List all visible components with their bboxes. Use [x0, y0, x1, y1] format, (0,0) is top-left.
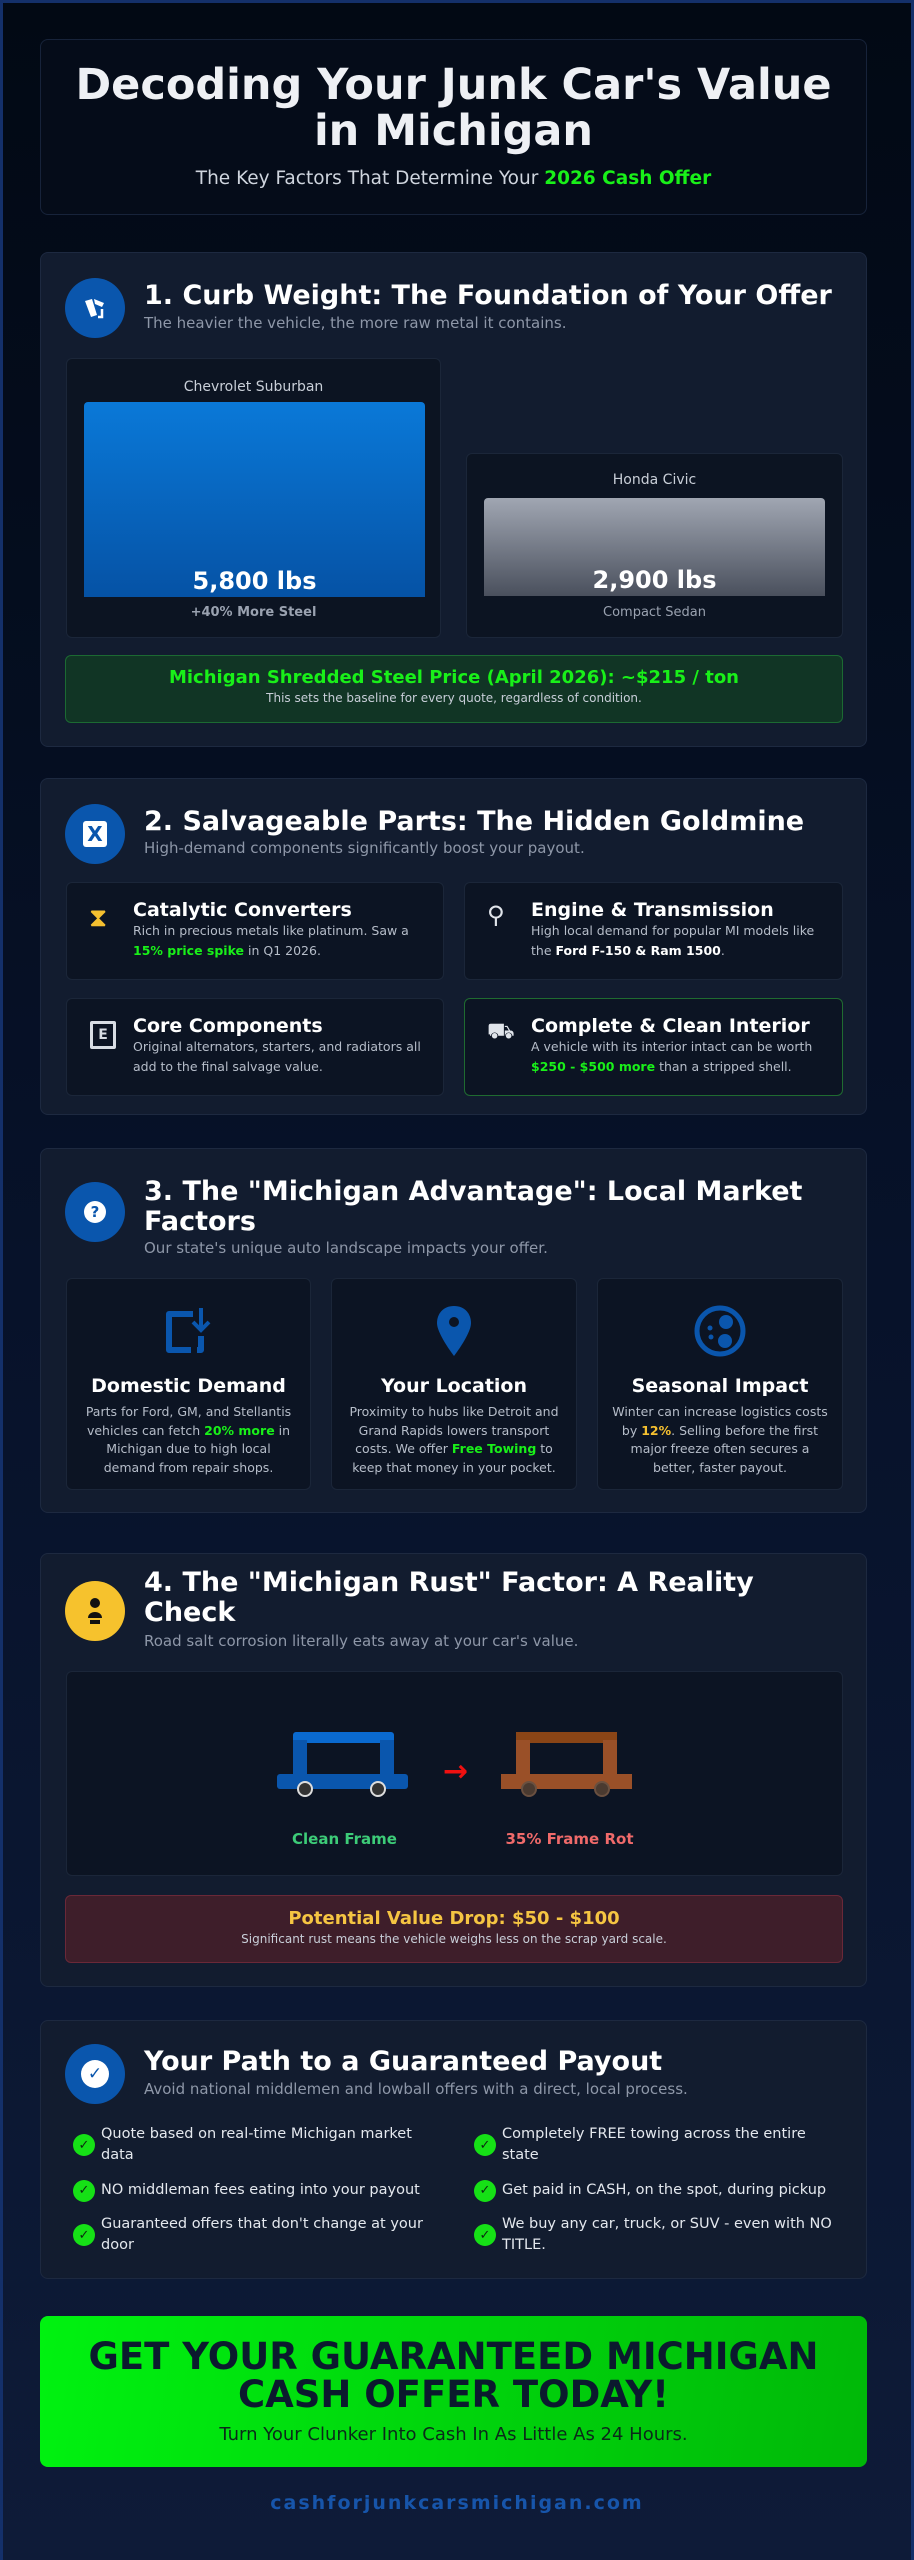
card: seasonal: Seasonal Impact: [632, 1375, 808, 1397]
panel: michigan advantage: [40, 1148, 867, 1513]
card: domestic demand: Parts for Ford, GM, and Stellantis vehicles can fetch 20% more in Michigan due to high local demand from repair shops.: [86, 1404, 291, 1474]
icon: warning: [65, 1581, 125, 1641]
checklist: [73, 2126, 832, 2253]
subheading: High-demand components significantly boost your payout.: [144, 839, 585, 857]
icon: question: [65, 1182, 125, 1242]
card: interior: A vehicle with its interior intact can be worth $250 - $500 more than a stripped shell.: [531, 1039, 812, 1074]
subheading: Avoid national middlemen and lowball offers with a direct, local process.: [144, 2080, 688, 2098]
heading: 1. Curb Weight: The Foundation of Your Offer: [144, 280, 832, 311]
icon: question: ?: [91, 1203, 99, 1221]
icon: check: [65, 2044, 125, 2104]
icon: core: [90, 1021, 116, 1049]
arrow: →: [443, 1754, 468, 1789]
bar: civic: 2,900 lbs: [593, 566, 716, 594]
bar: suburban: 5,800 lbs: [193, 567, 316, 595]
heading: [144, 1176, 802, 1237]
card: engine: Engine & Transmission: [531, 899, 774, 921]
callout: steel price: This sets the baseline for every quote, regardless of condition.: [266, 691, 642, 705]
subheading: Road salt corrosion literally eats away at your car's value.: [144, 1632, 578, 1650]
callout: steel price: Michigan Shredded Steel Price (April 2026): ~$215 / ton: [169, 667, 739, 688]
icon: pin: [437, 1306, 471, 1356]
card: interior: [464, 998, 843, 1096]
bar: suburban: Chevrolet Suburban: [184, 379, 323, 395]
heading: Your Path to a Guaranteed Payout: [144, 2046, 662, 2077]
bar: civic: Compact Sedan: [603, 605, 706, 620]
icon: clean frame: [277, 1732, 408, 1797]
icon: x: [65, 804, 125, 864]
icon: import: [166, 1308, 210, 1353]
heading: Check: [144, 1597, 235, 1628]
heading: Factors: [144, 1206, 256, 1237]
card: engine: High local demand for popular MI models like the Ford F-150 & Ram 1500.: [531, 923, 814, 958]
panel: salvageable parts: [40, 778, 867, 1115]
cta heading: GET YOUR GUARANTEED MICHIGAN: [89, 2335, 818, 2378]
card: seasonal: Winter can increase logistics costs by 12%. Selling before the first major freeze often secures a better, faster payout.: [612, 1404, 828, 1474]
heading: 2. Salvageable Parts: The Hidden Goldmine: [144, 806, 804, 837]
checklist: We buy any car, truck, or SUV - even with NO TITLE.: [502, 2216, 832, 2253]
heading: 4. The "Michigan Rust" Factor: A Reality: [144, 1567, 754, 1598]
cta heading: [89, 2335, 818, 2416]
card: seasonal: [597, 1278, 843, 1490]
card: location: [331, 1278, 577, 1490]
card: core: [66, 998, 444, 1096]
checklist: ✓: [480, 2138, 490, 2152]
panel: rust: [40, 1553, 867, 1987]
icon: catalytic: ⧗: [89, 903, 107, 933]
checklist: NO middleman fees eating into your payout: [101, 2182, 420, 2198]
bar: civic: [466, 453, 843, 638]
icon: engine: ⚲: [487, 901, 505, 929]
icon: core: E: [98, 1027, 108, 1043]
checklist: Quote based on real-time Michigan market data: [101, 2126, 412, 2163]
subheading: The heavier the vehicle, the more raw metal it contains.: [144, 314, 566, 332]
title: [75, 60, 832, 156]
card: core: Core Components: [133, 1015, 323, 1037]
card: domestic demand: Domestic Demand: [91, 1375, 286, 1397]
cta heading: CASH OFFER TODAY!: [238, 2373, 669, 2416]
subtitle: The Key Factors That Determine Your 2026 Cash Offer: [196, 168, 711, 189]
card: engine: [464, 882, 843, 980]
checklist: Get paid in CASH, on the spot, during pickup: [502, 2182, 826, 2198]
card: interior: Complete & Clean Interior: [531, 1015, 810, 1037]
card: catalytic: Catalytic Converters: [133, 899, 352, 921]
panel: guaranteed payout: [40, 2020, 867, 2279]
label: clean: Clean Frame: [292, 1830, 397, 1848]
icon: rusted frame: [501, 1732, 632, 1797]
card: domestic demand: [66, 1278, 311, 1490]
bar: suburban: [66, 358, 441, 638]
callout: value drop: Significant rust means the vehicle weighs less on the scrap yard scale.: [241, 1932, 667, 1946]
title: Decoding Your Junk Car's Value: [75, 60, 832, 110]
cta subtext: Turn Your Clunker Into Cash In As Little As 24 Hours.: [219, 2424, 688, 2445]
footer url: cashforjunkcarsmichigan.com: [270, 2492, 644, 2514]
panel: curb weight: [40, 252, 867, 747]
checklist: Guaranteed offers that don't change at your door: [101, 2216, 423, 2253]
callout: value drop: Potential Value Drop: $50 - $100: [288, 1908, 620, 1929]
title: in Michigan: [314, 106, 593, 156]
checklist: ✓: [79, 2138, 89, 2152]
icon: globe: [694, 1306, 746, 1356]
checklist: ✓: [480, 2183, 490, 2198]
icon: check: ✓: [88, 2064, 102, 2084]
header card: [40, 39, 867, 215]
card: location: Proximity to hubs like Detroit and Grand Rapids lowers transport costs. We offer Free Towing to keep that money in your pocket.: [349, 1404, 559, 1474]
card: location: Your Location: [381, 1375, 527, 1397]
card: core: Original alternators, starters, and radiators all add to the final salvage value.: [133, 1039, 421, 1074]
icon: x: X: [87, 822, 103, 846]
checklist: ✓: [79, 2183, 89, 2198]
checklist: Completely FREE towing across the entire state: [502, 2126, 806, 2163]
checklist: ✓: [480, 2228, 490, 2242]
callout: steel price: [65, 655, 843, 723]
bar: suburban: +40% More Steel: [191, 605, 316, 620]
bar: civic: Honda Civic: [613, 472, 696, 488]
callout: value drop: [65, 1895, 843, 1963]
frame comparison: [66, 1671, 843, 1876]
card: catalytic: Rich in precious metals like platinum. Saw a 15% price spike in Q1 2026.: [133, 923, 409, 958]
checklist: ✓: [79, 2228, 89, 2242]
cta banner: [40, 2316, 867, 2467]
icon: scale: [65, 278, 125, 338]
label: rot: 35% Frame Rot: [506, 1830, 633, 1848]
icon: seat: ⛟: [487, 1019, 515, 1044]
heading: [144, 1567, 754, 1628]
heading: 3. The "Michigan Advantage": Local Market: [144, 1176, 802, 1207]
card: catalytic: [66, 882, 444, 980]
subheading: Our state's unique auto landscape impacts your offer.: [144, 1239, 548, 1257]
